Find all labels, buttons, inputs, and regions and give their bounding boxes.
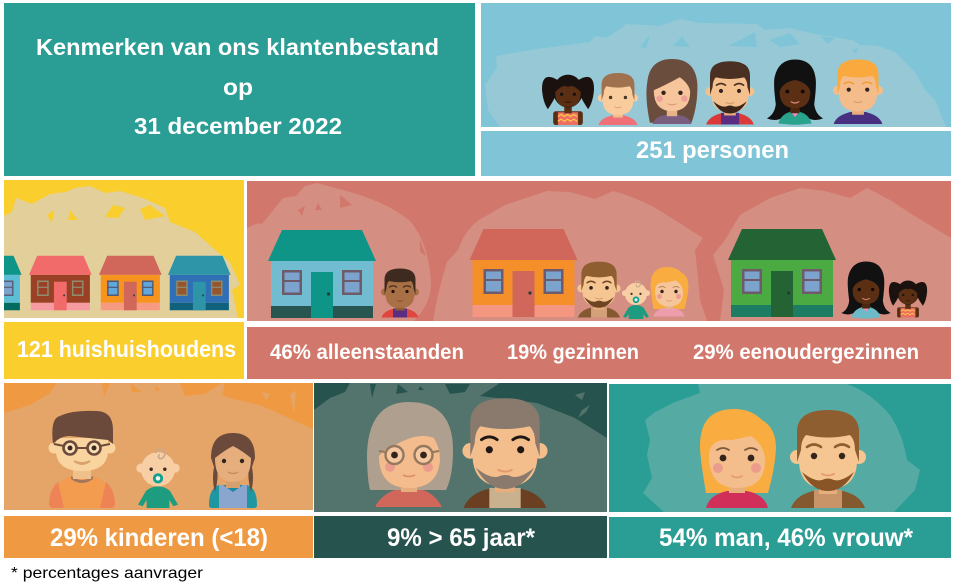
person: father: [577, 262, 621, 318]
brush background: [314, 383, 607, 512]
label: 251 personen: 251 personen: [636, 137, 789, 164]
house: blue, partly cropped: [4, 256, 22, 310]
person: baby: [136, 449, 180, 508]
person: boy in pink shirt: [598, 73, 638, 125]
person: boy with glasses: [48, 411, 116, 508]
label panel: seniors: [314, 516, 607, 558]
label panel: children: [4, 516, 313, 558]
footnote: * percentages aanvrager: [11, 565, 204, 582]
title line 3: 31 december 2022: [134, 113, 342, 139]
person: woman with blond hair: [700, 409, 776, 508]
label: 19% gezinnen: 19% gezinnen: [507, 340, 639, 364]
panel: children illustration: [4, 383, 313, 510]
person: daughter: [889, 280, 927, 318]
label panel: gender: [609, 517, 951, 558]
person: woman with brown hair: [646, 59, 697, 124]
brush background: [247, 183, 951, 321]
person: baby: [622, 281, 650, 319]
brush background: [643, 384, 920, 513]
panel: seniors illustration: [314, 383, 607, 512]
brush background: [4, 383, 313, 510]
label: 121 huishuishoudens: 121 huishuishoudens: [17, 336, 236, 362]
person: man with dark beard: [705, 61, 755, 124]
panel: households illustration: [0, 180, 245, 318]
panel: gender illustration: [609, 384, 951, 513]
brush background: [485, 19, 946, 127]
person: woman with black hair: [767, 59, 823, 125]
person: mother: [650, 267, 688, 316]
person: grandmother with glasses: [367, 402, 453, 507]
label panel: persons: [481, 131, 951, 176]
label panel: household types: [247, 327, 951, 379]
label: 29% eenoudergezinnen: 29% eenoudergezinnen: [693, 340, 919, 364]
house: single, teal roof: [268, 230, 376, 318]
title line 2: op: [223, 74, 253, 100]
house: single parent, green: [728, 229, 836, 317]
label: 46% alleenstaanden: 46% alleenstaanden: [270, 340, 464, 364]
brush background: [0, 186, 245, 318]
label: 29% kinderen: 29% kinderen (<18): [50, 524, 268, 552]
house: family, orange: [470, 229, 578, 317]
house: orange: [99, 256, 162, 310]
person: blond boy: [833, 59, 883, 124]
person: girl with braids: [209, 433, 257, 508]
person: grandfather with beard: [462, 398, 548, 508]
label: 54% man, 46% vrouw: 54% man, 46% vrouw*: [659, 524, 913, 552]
person: man with brown beard: [790, 410, 866, 508]
person: girl with pigtails: [542, 75, 594, 125]
person: single mother: [841, 262, 891, 319]
label panel: households: [4, 322, 244, 379]
house: brown: [29, 256, 92, 310]
panel: persons illustration: [481, 3, 951, 127]
label: 9% > 65 jaar: 9% > 65 jaar*: [387, 524, 535, 552]
panel: household types illustration: [247, 181, 951, 321]
house: blue with teal roof: [168, 256, 231, 310]
panel: title: [4, 3, 475, 176]
title line 1: Kenmerken van ons klantenbestand: [36, 34, 439, 60]
person: boy, single household: [381, 268, 419, 318]
